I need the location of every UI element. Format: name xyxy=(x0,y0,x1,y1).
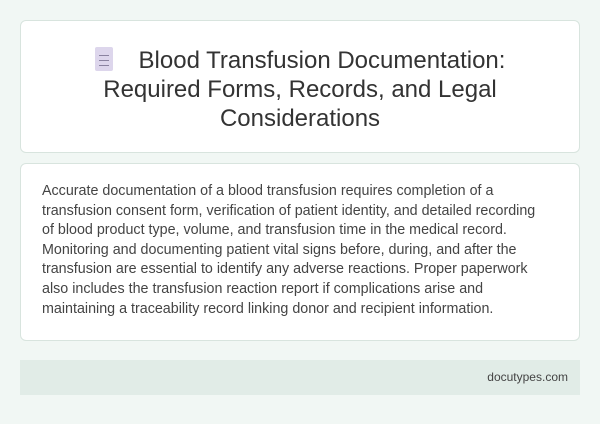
description text: transfusion consent form, verification of patient identity, and detailed recording xyxy=(42,203,535,219)
title: Blood Transfusion Documentation: xyxy=(139,47,505,74)
title: Required Forms, Records, and Legal xyxy=(103,76,497,103)
description card xyxy=(20,163,580,341)
title: Considerations xyxy=(220,105,380,132)
footer: docutypes.com xyxy=(487,370,568,384)
footer xyxy=(20,360,580,395)
description text: Monitoring and documenting patient vital signs before, during, and after the xyxy=(42,242,516,258)
title xyxy=(95,47,505,132)
description text: of blood product type, volume, and transfusion time in the medical record. xyxy=(42,222,507,238)
description text: maintaining a traceability record linking donor and recipient information. xyxy=(42,301,493,317)
title card xyxy=(20,20,580,153)
description text: also includes the transfusion reaction report if complications arise and xyxy=(42,281,483,297)
description text xyxy=(42,183,535,317)
description text: Accurate documentation of a blood transfusion requires completion of a xyxy=(42,183,493,199)
description text: transfusion are essential to identify any adverse reactions. Proper paperwork xyxy=(42,261,528,277)
